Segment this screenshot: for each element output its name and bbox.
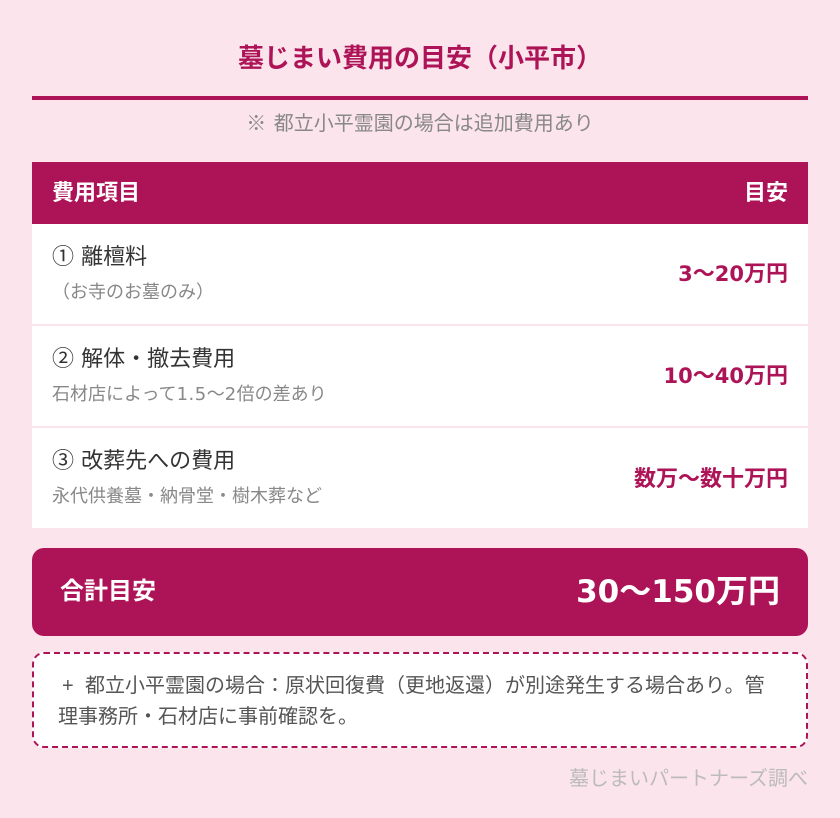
row 3 value: 数万～数十万円 [634,466,788,491]
row 1 background [32,224,808,324]
row 2 note: 石材店によって1.5～2倍の差あり [52,384,327,405]
row 3 note: 永代供養墓・納骨堂・樹木葬など [52,486,322,506]
row 1 note: （お寺のお墓のみ） [52,282,214,302]
header label: estimate: 目安 [744,180,788,205]
table: cost items [32,162,808,528]
source credit: 墓じまいパートナーズ調べ [569,768,808,790]
subtitle: ※ 都立小平霊園の場合は追加費用あり [246,113,594,135]
row 3 name: ③ 改葬先への費用 [52,448,235,473]
row 1 name: ① 離檀料 [52,244,147,269]
table header [32,162,808,224]
header label: item: 費用項目 [52,180,140,205]
row 2 value: 10～40万円 [664,363,788,388]
row 3 background [32,428,808,528]
total value: 30～150万円 [576,573,780,610]
total panel [32,548,808,636]
note text: 都立小平霊園の場合：原状回復費（更地返還）が別途発生する場合あり。管理事務所・石材店に事前確認を。 [58,675,765,728]
row 2 name: ② 解体・撤去費用 [52,346,235,371]
note callout [32,652,808,748]
row 1 value: 3～20万円 [678,261,788,286]
note text: + [62,675,74,697]
total label: 合計目安 [60,578,156,605]
row 2 background [32,326,808,426]
title rule [32,96,808,100]
title: 墓じまい費用の目安（小平市） [238,43,602,73]
